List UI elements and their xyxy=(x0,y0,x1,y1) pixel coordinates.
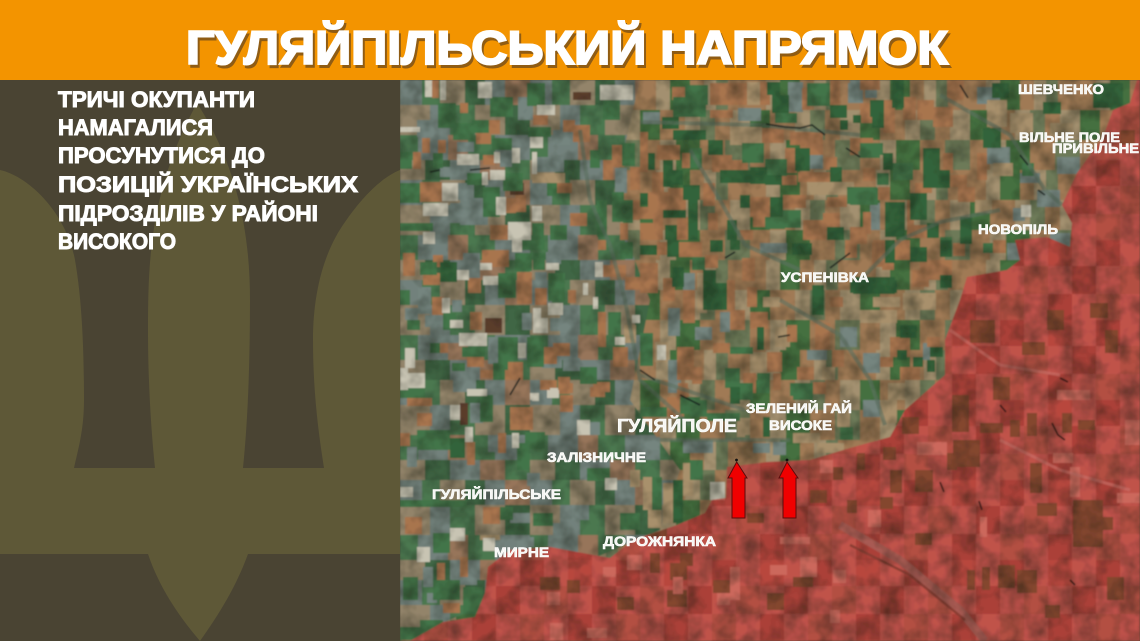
text block: description: ПІДРОЗДІЛІВ У РАЙОНІ xyxy=(58,201,318,226)
green fields xyxy=(400,83,1034,640)
place labels xyxy=(432,81,1139,560)
light red plots xyxy=(547,390,1140,640)
place labels: ВИСОКЕ xyxy=(769,417,832,433)
icon: trident watermark xyxy=(0,103,400,641)
arrow: left advance xyxy=(728,459,747,518)
dark ravines in red zone xyxy=(940,378,1075,585)
dark green fields xyxy=(440,80,1123,523)
place labels: ШЕВЧЕНКО xyxy=(1018,81,1104,97)
text block: description: ПОЗИЦІЙ УКРАЇНСЬКИХ xyxy=(58,172,358,197)
red occupied territory xyxy=(400,80,1140,641)
text block: description xyxy=(58,87,358,254)
olive-brown plots xyxy=(540,130,1135,618)
text block: description: ПРОСУНУТИСЯ ДО xyxy=(58,143,265,168)
place labels: УСПЕНІВКА xyxy=(781,269,869,285)
panel: satellite map xyxy=(400,80,1140,641)
place labels: ДОРОЖНЯНКА xyxy=(603,533,716,549)
arrow: right advance xyxy=(779,459,798,518)
panel: left sidebar with trident xyxy=(0,80,400,641)
place labels: ЗЕЛЕНИЙ ГАЙ xyxy=(746,399,852,416)
place labels: ГУЛЯЙПІЛЬСЬКЕ xyxy=(432,485,561,502)
place labels: ГУЛЯЙПОЛЕ xyxy=(617,415,737,436)
text block: description: ТРИЧІ ОКУПАНТИ xyxy=(58,87,255,112)
diagonal ridge xyxy=(840,525,985,641)
texture: dark noise xyxy=(400,80,1140,641)
tan fields xyxy=(480,82,1073,540)
text block: description: ВИСОКОГО xyxy=(58,229,176,254)
ravines xyxy=(430,85,1045,405)
dark brown plots xyxy=(460,92,591,425)
white fields xyxy=(400,80,1031,562)
place labels: ЗАЛІЗНИЧНЕ xyxy=(547,449,646,465)
place labels: НОВОПІЛЬ xyxy=(978,221,1058,237)
valleys xyxy=(580,95,1062,440)
header banner xyxy=(0,0,1140,80)
slate grey fields xyxy=(405,80,1080,603)
place labels: ПРИВІЛЬНЕ xyxy=(1052,140,1139,156)
brown-orange fields xyxy=(400,80,1006,613)
text block: description: НАМАГАЛИСЯ xyxy=(58,115,213,140)
place labels: МИРНЕ xyxy=(494,544,549,560)
place labels: ВІЛЬНЕ ПОЛЕ xyxy=(1019,129,1120,145)
title: ГУЛЯЙПІЛЬСЬКИЙ НАПРЯМОК xyxy=(186,20,949,75)
